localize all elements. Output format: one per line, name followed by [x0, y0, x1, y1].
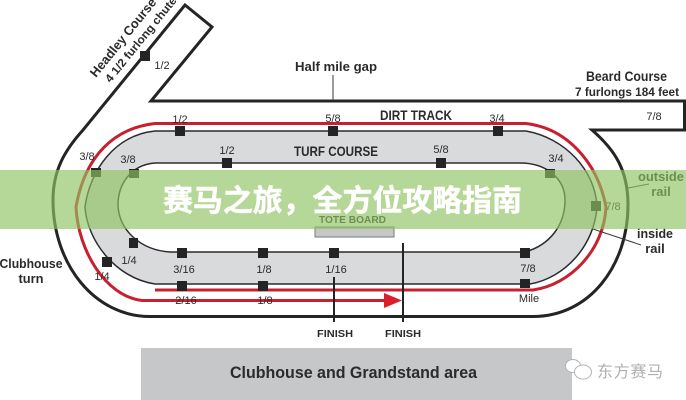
furlong labels: 1/8: [256, 264, 272, 276]
label: inside rail: [637, 226, 673, 256]
panel: clubhouse and grandstand area: Clubhouse and Grandstand area: [230, 363, 478, 382]
label: Clubhouse turn: turn: [18, 271, 44, 286]
furlong labels: 1/2: [219, 145, 235, 157]
label: turf course: TURF COURSE: [294, 143, 378, 159]
furlong labels: 3/16: [173, 264, 195, 276]
furlong labels: 1/4: [121, 255, 137, 267]
watermark: WeChat account: [566, 360, 663, 381]
finish lines: [334, 243, 403, 322]
label: Beard Course: [575, 69, 679, 99]
label: Clubhouse turn: Clubhouse: [0, 256, 62, 271]
furlong labels: Mile: [519, 293, 539, 305]
inner rail of turf course: [118, 163, 565, 252]
label: outside rail: outside: [638, 169, 684, 184]
label: outside rail: [638, 169, 684, 199]
furlong labels: 7/8: [605, 201, 621, 213]
furlong labels: 3/8: [120, 154, 136, 166]
furlong labels: 3/4: [548, 153, 564, 165]
inner rail of dirt track: [85, 131, 597, 284]
leader lines: [333, 75, 649, 245]
finish labels: [317, 328, 421, 340]
label: Clubhouse turn: [0, 256, 62, 286]
furlong pole markers: [91, 51, 601, 291]
label: Beard Course: 7 furlongs 184 feet: [575, 85, 679, 99]
furlong labels: [79, 60, 662, 307]
arrow: race direction: [384, 293, 402, 308]
furlong labels: 5/8: [325, 113, 341, 125]
title: 赛马之旅，全方位攻略指南: [163, 184, 522, 218]
red race route: [76, 124, 606, 300]
label: outside rail: rail: [651, 184, 671, 199]
furlong labels: 1/2: [154, 60, 170, 72]
furlong labels: 1/2: [172, 114, 188, 126]
furlong labels: 3/4: [489, 113, 505, 125]
furlong labels: 2/16: [175, 295, 197, 307]
label: inside rail: inside: [637, 226, 673, 241]
furlong labels: 7/8: [646, 111, 662, 123]
finish labels: FINISH: [385, 328, 421, 340]
label: dirt track: DIRT TRACK: [380, 107, 452, 123]
furlong labels: 1/8: [257, 295, 273, 307]
label: Headley Course: 4 1/2 furlong chute: [103, 0, 179, 85]
outer rail and training chutes: [53, 5, 684, 316]
finish labels: FINISH: [317, 328, 353, 340]
watermark: WeChat account: 东方赛马: [597, 362, 663, 381]
furlong labels: 1/16: [325, 264, 347, 276]
label: Beard Course: Beard Course: [586, 69, 667, 84]
label: inside rail: rail: [645, 241, 665, 256]
title band: [0, 170, 686, 229]
tote board: TOTE BOARD: [319, 214, 386, 226]
furlong labels: 1/4: [94, 271, 110, 283]
furlong labels: 3/8: [79, 151, 95, 163]
tote board: [315, 214, 394, 237]
panel: turf course surface: [85, 131, 597, 284]
label: half mile gap: Half mile gap: [295, 59, 377, 74]
furlong labels: 5/8: [433, 144, 449, 156]
furlong labels: 7/8: [520, 263, 536, 275]
panel: clubhouse and grandstand area: [141, 348, 572, 400]
